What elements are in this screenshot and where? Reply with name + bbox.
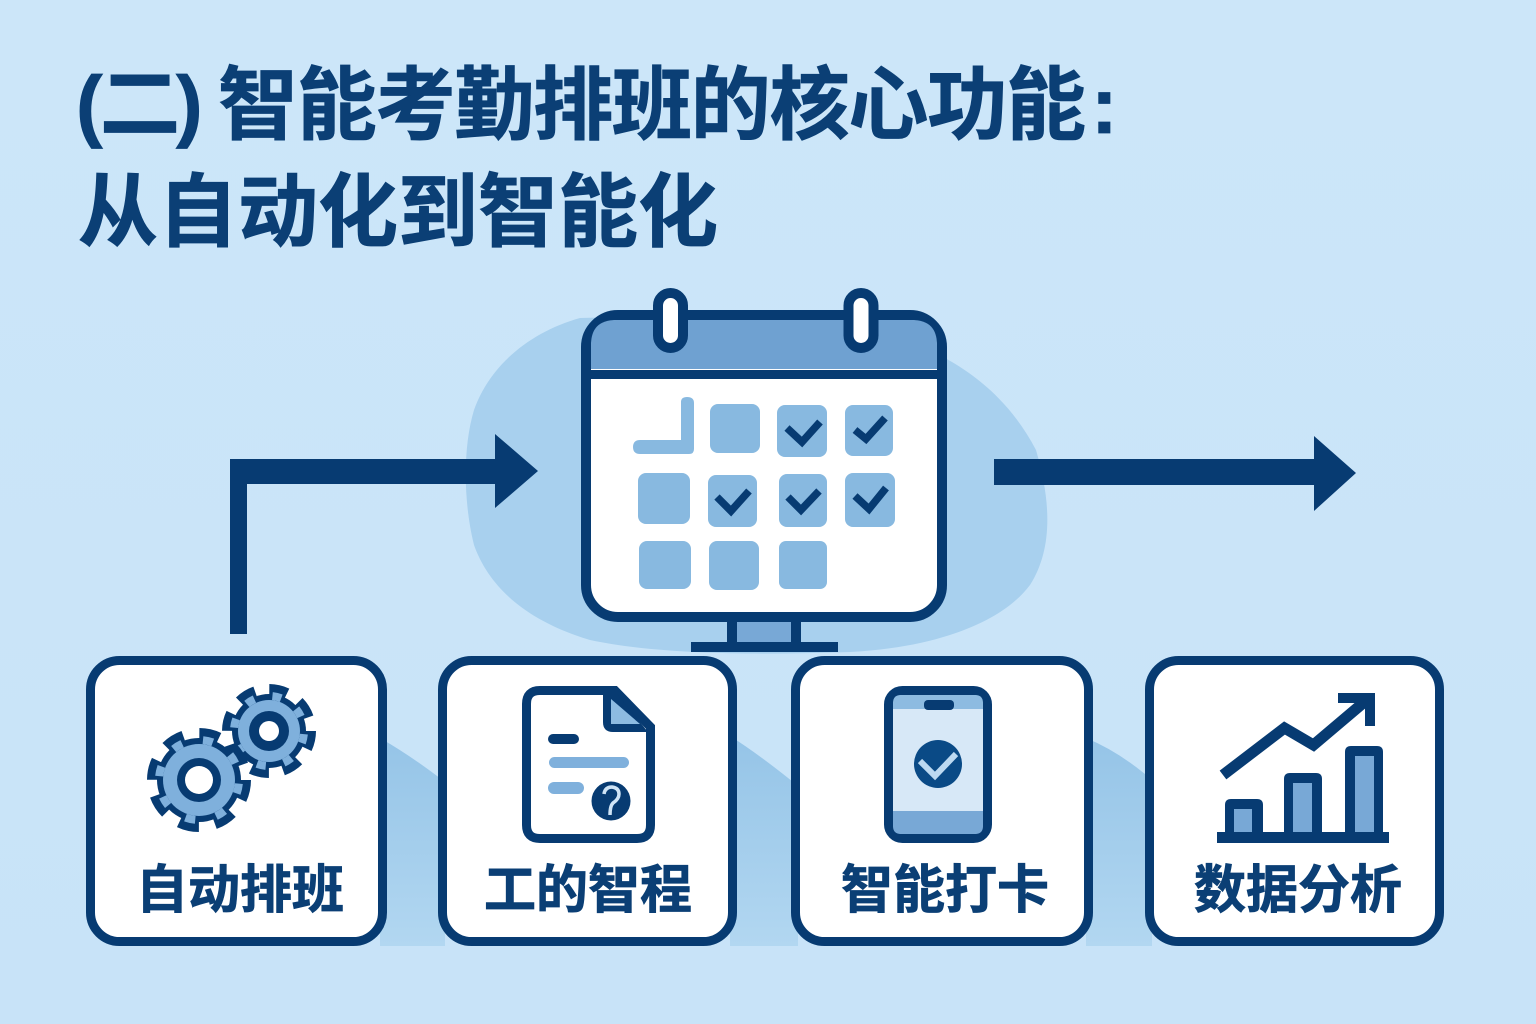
- calendar body: [586, 315, 942, 617]
- icon: phone with check: [888, 690, 988, 838]
- title: ): [176, 60, 203, 149]
- card: 数据分析: [1150, 660, 1440, 942]
- title: 智能考勤排班的核心功能: [218, 61, 1085, 150]
- title: 二: [100, 60, 180, 149]
- arrow: into calendar: [230, 434, 538, 634]
- title: [76, 60, 1118, 257]
- calendar ring right: [848, 293, 874, 348]
- card label: 智能打卡: [841, 862, 1049, 920]
- title: :: [1091, 61, 1118, 150]
- calendar ring left: [658, 293, 683, 348]
- background blob: [466, 315, 1047, 654]
- icon: gears: [153, 690, 310, 826]
- calendar header: [591, 320, 937, 369]
- card label: 自动排班: [136, 862, 344, 920]
- calendar monitor: [586, 293, 942, 652]
- calendar check marks: [717, 418, 886, 511]
- arrow: out of calendar: [994, 436, 1356, 511]
- card gap shading: [380, 736, 1152, 946]
- card label: 数据分析: [1194, 862, 1402, 920]
- card: 工的智程: [442, 660, 732, 942]
- icon: growth bar chart: [1217, 698, 1389, 843]
- card label: 工的智程: [484, 862, 692, 920]
- monitor stand: [691, 620, 838, 652]
- icon: document with question mark: [526, 690, 650, 838]
- calendar day cells: [633, 397, 895, 590]
- title: 从自动化到智能化: [78, 168, 718, 257]
- title: (: [76, 60, 103, 149]
- card: 自动排班: [90, 660, 382, 942]
- card: 智能打卡: [796, 660, 1088, 942]
